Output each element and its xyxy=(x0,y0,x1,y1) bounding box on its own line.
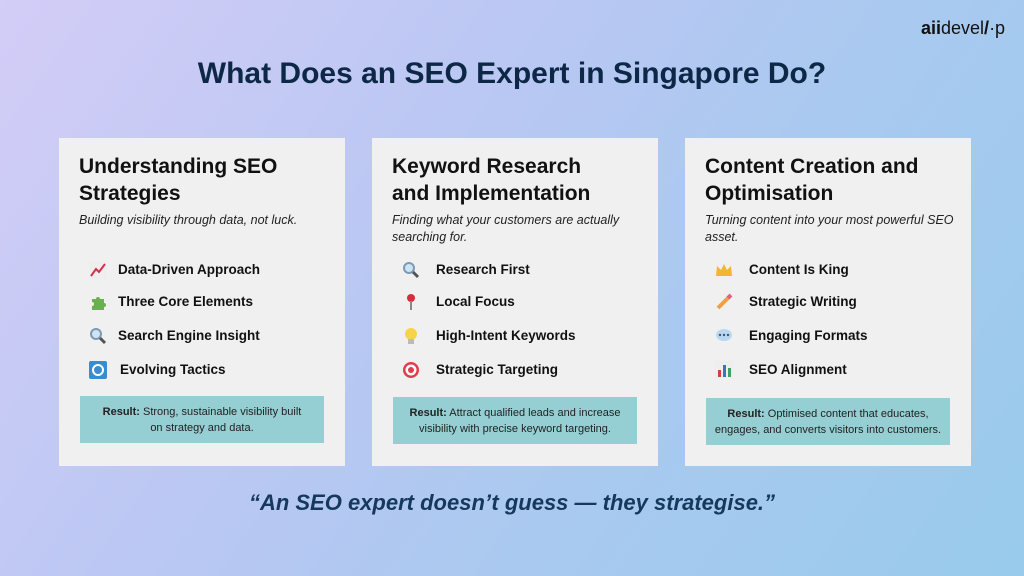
result box: Result: Strong, sustainable visibility built xyxy=(103,406,301,418)
item: research first: Research First xyxy=(436,262,530,277)
result box: visibility with precise keyword targeting. xyxy=(419,423,611,435)
item: three core: Three Core Elements xyxy=(118,294,253,309)
logo: aiidevel/·p xyxy=(921,18,1005,38)
heading: Strategies xyxy=(79,182,181,205)
subtitle: Building visibility through data, not luck. xyxy=(79,213,297,227)
item: targeting: Strategic Targeting xyxy=(436,362,558,377)
title: What Does an SEO Expert in Singapore Do? xyxy=(198,57,826,90)
item: evolving tactics: Evolving Tactics xyxy=(120,362,226,377)
heading: Keyword Research xyxy=(392,155,581,178)
item: SEO alignment: SEO Alignment xyxy=(749,362,847,377)
heading: and Implementation xyxy=(392,182,590,205)
item: local focus xyxy=(407,294,515,310)
result box: Result: Attract qualified leads and increase xyxy=(410,407,620,419)
subtitle: Turning content into your most powerful SEO asset. xyxy=(705,213,954,244)
item: high intent: High-Intent Keywords xyxy=(436,328,576,343)
item: search insight: Search Engine Insight xyxy=(118,328,260,343)
result box xyxy=(80,396,324,443)
result box: on strategy and data. xyxy=(150,422,254,434)
panel: understanding SEO strategies xyxy=(59,138,345,466)
item: local focus: Local Focus xyxy=(436,294,515,309)
heading xyxy=(392,155,590,205)
result box: Result: Optimised content that educates, xyxy=(727,408,929,420)
panel: keyword research xyxy=(372,138,658,466)
subtitle: Finding what your customers are actually searching for. xyxy=(392,213,619,244)
heading xyxy=(79,155,277,205)
heading xyxy=(705,155,918,205)
item: writing: Strategic Writing xyxy=(749,294,857,309)
result box xyxy=(393,397,637,444)
heading: Optimisation xyxy=(705,182,833,205)
item: formats: Engaging Formats xyxy=(749,328,868,343)
panel: content creation xyxy=(685,138,971,466)
heading: Understanding SEO xyxy=(79,155,277,178)
result box xyxy=(706,398,950,445)
item: content king: Content Is King xyxy=(749,262,849,277)
heading: Content Creation and xyxy=(705,155,918,178)
item: research first xyxy=(403,262,530,278)
item: data-driven: Data-Driven Approach xyxy=(118,262,260,277)
quote: “An SEO expert doesn’t guess — they strategise.” xyxy=(249,490,775,515)
result box: engages, and converts visitors into customers. xyxy=(715,424,941,436)
item: evolving tactics xyxy=(89,361,226,379)
